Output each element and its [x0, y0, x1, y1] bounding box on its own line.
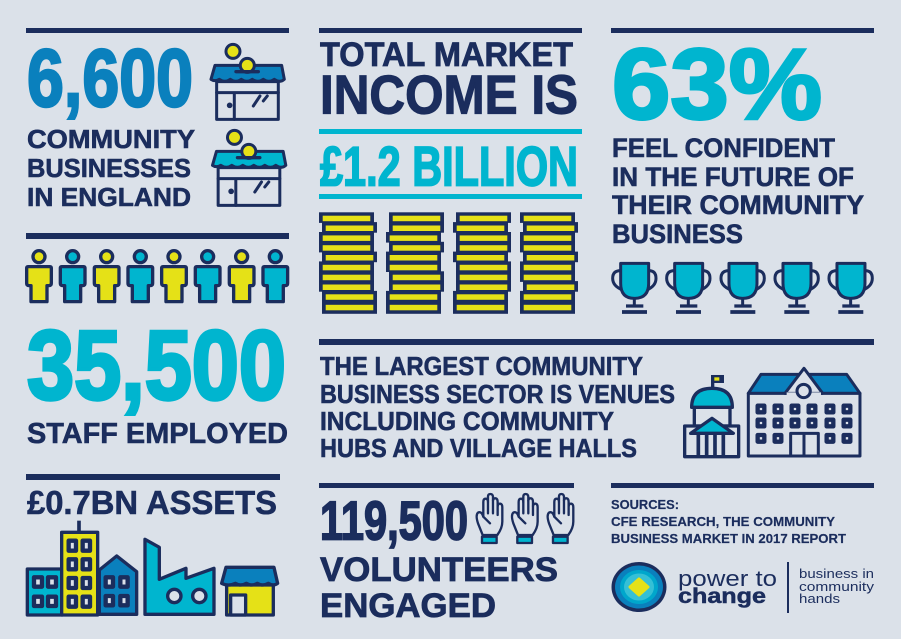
- icon row: three raised hands: [477, 494, 573, 543]
- heading: total market income is: INCOME IS: [320, 64, 578, 126]
- text: staff employed: STAFF EMPLOYED: [27, 418, 288, 450]
- text: sources: CFE RESEARCH, THE COMMUNITY: [611, 514, 835, 529]
- panel: staff employed: [26, 233, 289, 450]
- text: largest sector: [320, 351, 675, 463]
- logo: strapline: business in: [799, 566, 874, 581]
- logo: strapline: hands: [799, 591, 841, 606]
- icon: blue shop with coins: [211, 44, 284, 119]
- panel: largest sector venues: [319, 339, 874, 463]
- panel: community businesses: [26, 28, 289, 212]
- icon: stacks of coins: [319, 212, 578, 314]
- heading: total market income is: [320, 36, 578, 126]
- text: community businesses in England: IN ENGLAND: [27, 182, 191, 212]
- text: community businesses in England: BUSINESSES: [27, 153, 191, 183]
- text: largest sector: HUBS AND VILLAGE HALLS: [320, 433, 637, 463]
- panel: assets: [26, 474, 280, 615]
- logo: strapline: [799, 566, 875, 606]
- stat: 63%: 63%: [612, 28, 822, 140]
- icon: large hall building: [748, 368, 860, 456]
- text: sources: BUSINESS MARKET IN 2017 REPORT: [611, 531, 846, 546]
- panel: confidence: [611, 28, 874, 312]
- logo: strapline: community: [799, 579, 875, 594]
- text: largest sector: THE LARGEST COMMUNITY: [320, 351, 643, 381]
- stat: 6,600: 6,600: [27, 33, 193, 124]
- logo: concentric emblem: [612, 562, 666, 612]
- stat: 119,500: 119,500: [320, 490, 468, 552]
- heading: total market income is: TOTAL MARKET: [320, 36, 573, 74]
- text: feel confident: THEIR COMMUNITY: [612, 190, 864, 220]
- text: largest sector: BUSINESS SECTOR IS VENUES: [320, 379, 675, 409]
- icon: domed hall: [685, 375, 739, 457]
- heading: assets: £0.7BN ASSETS: [27, 484, 277, 521]
- text: feel confident: IN THE FUTURE OF: [612, 162, 854, 192]
- text: feel confident: FEEL CONFIDENT: [612, 133, 835, 163]
- text: volunteers engaged: [320, 551, 558, 625]
- text: feel confident: BUSINESS: [612, 219, 743, 249]
- stat: 35,500: 35,500: [27, 310, 286, 420]
- logo: power to change wordmark: [678, 566, 777, 608]
- panel: volunteers: [319, 483, 574, 625]
- text: sources: SOURCES:: [611, 497, 679, 512]
- text: community businesses in England: [27, 124, 195, 212]
- text: volunteers engaged: VOLUNTEERS: [320, 551, 558, 589]
- icon: cyan shop with coins: [212, 130, 286, 205]
- text: sources: [611, 497, 846, 546]
- logo: power to change wordmark: change: [678, 585, 766, 608]
- text: feel confident: [612, 133, 864, 249]
- text: largest sector: INCLUDING COMMUNITY: [320, 406, 614, 436]
- panel: total market income: [319, 28, 582, 314]
- icon: town skyline: [27, 521, 278, 615]
- logo: power to change wordmark: power to: [678, 566, 777, 591]
- icon row: five trophies: [613, 263, 872, 312]
- text: community businesses in England: COMMUNITY: [27, 124, 195, 154]
- text: volunteers engaged: ENGAGED: [320, 587, 496, 625]
- icon row: eight people: [27, 251, 288, 302]
- panel: sources and logo: [611, 483, 875, 613]
- stat: 1.2 billion: £1.2 BILLION: [320, 134, 578, 198]
